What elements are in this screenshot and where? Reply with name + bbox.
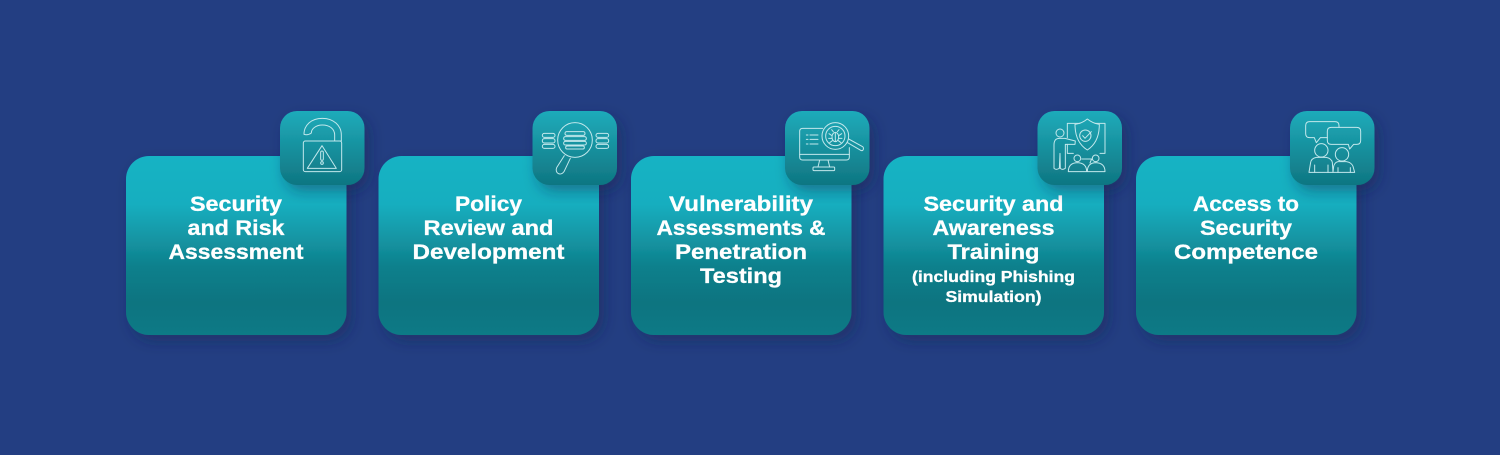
icon badge 4 bbox=[1038, 111, 1122, 185]
heading 3: Assessments & bbox=[656, 216, 826, 240]
heading 2: Policy bbox=[455, 192, 522, 216]
panel: Vulnerability Assessments & Penetration Testing bbox=[631, 111, 870, 335]
heading 5: Competence bbox=[1174, 240, 1318, 264]
icon badge 2 bbox=[532, 111, 617, 185]
icon: open padlock with warning bbox=[303, 118, 342, 172]
heading 1: Security bbox=[190, 192, 282, 216]
heading 3 bbox=[656, 192, 826, 288]
heading 5: Access to bbox=[1193, 192, 1299, 216]
heading 4: Training bbox=[948, 240, 1040, 264]
card background 2 bbox=[378, 156, 599, 335]
heading 4: Awareness bbox=[932, 216, 1055, 240]
heading 5: Security bbox=[1200, 216, 1292, 240]
panel: Policy Review and Development bbox=[378, 111, 617, 335]
card background 3 bbox=[631, 156, 852, 335]
heading 1: and Risk bbox=[188, 216, 285, 240]
icon: two people with speech bubbles bbox=[1306, 122, 1361, 172]
heading 1: Assessment bbox=[168, 240, 304, 264]
icon: monitor with bug under magnifier bbox=[800, 123, 863, 171]
heading 1 bbox=[168, 192, 304, 264]
panel: Access to Security Competence bbox=[1136, 111, 1374, 335]
icon badge 3 bbox=[785, 111, 870, 185]
heading 5 bbox=[1174, 192, 1318, 264]
heading 4 bbox=[912, 192, 1075, 306]
heading 3: Penetration bbox=[675, 240, 807, 264]
heading 3: Vulnerability bbox=[669, 192, 813, 216]
icon: magnifier over data rows bbox=[542, 123, 609, 174]
heading 2: Review and bbox=[424, 216, 554, 240]
icon badge 1 bbox=[280, 111, 364, 185]
panel: Security and Awareness Training bbox=[884, 111, 1122, 335]
heading 3: Testing bbox=[700, 264, 782, 288]
heading 2 bbox=[412, 192, 564, 264]
card background 1 bbox=[126, 156, 346, 335]
heading 2: Development bbox=[412, 240, 564, 264]
icon badge 5 bbox=[1290, 111, 1374, 185]
panel: Security and Risk Assessment bbox=[126, 111, 364, 335]
heading 4: (including Phishing bbox=[912, 269, 1075, 286]
card background 5 bbox=[1136, 156, 1356, 335]
heading 4: Security and bbox=[924, 192, 1064, 216]
icon: trainer presenting shield to audience bbox=[1054, 119, 1105, 172]
card background 4 bbox=[884, 156, 1104, 335]
heading 4: Simulation) bbox=[946, 289, 1042, 306]
